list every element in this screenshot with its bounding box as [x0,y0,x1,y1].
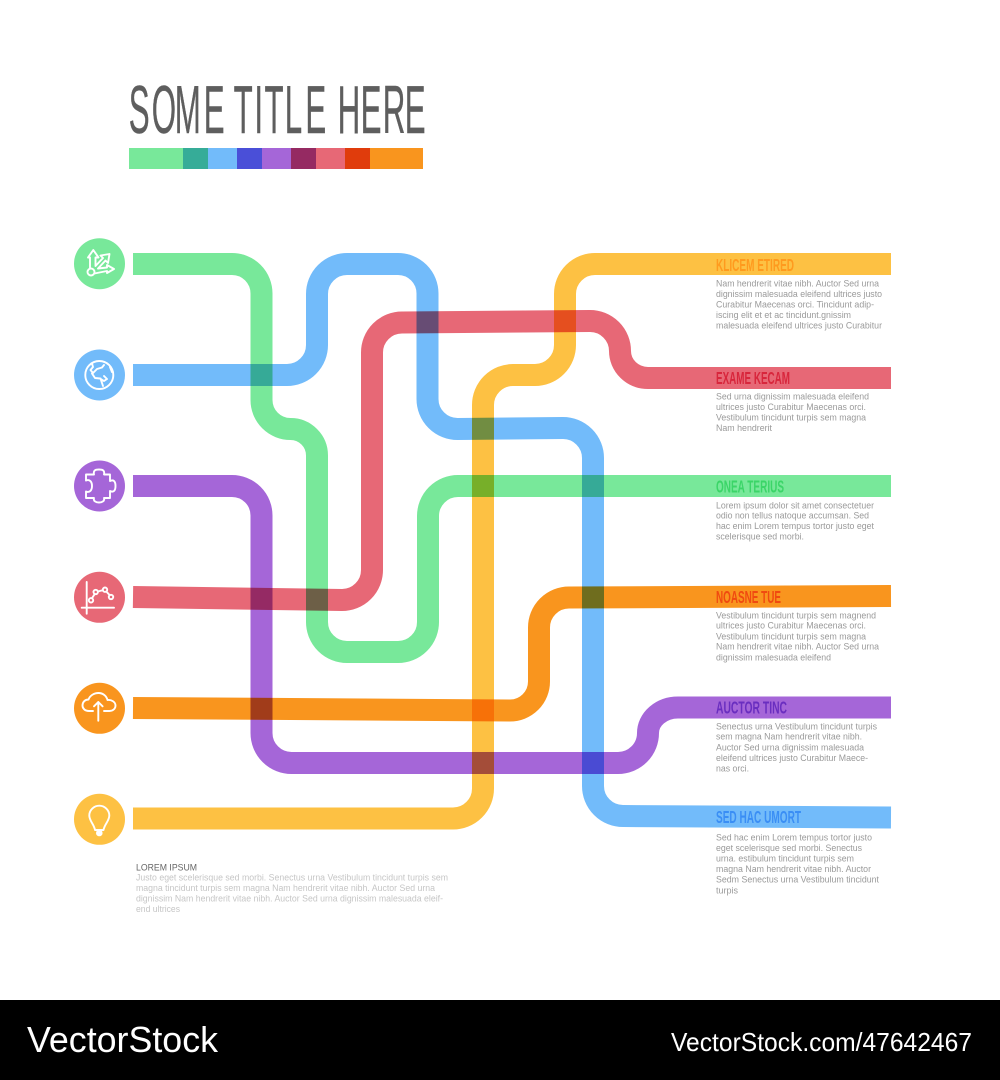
description: Curabitur Maecenas orci. Tincidunt adip- [716,300,874,310]
item 6: Sed Hac Umort [716,807,879,895]
description: ultrices justo Curabitur Maecenas orci. [716,402,866,412]
item 4: Noasne Tue [716,587,879,662]
icon: branching arrows [74,238,125,289]
description: Senectus urna Vestibulum tincidunt turpis [716,721,877,731]
footnote body: dignissim Nam hendrerit vitae nibh. Auctor Sed urna dignissim malesuada eleif- [136,894,443,904]
title: SOME TITLE HERE [129,73,426,148]
line: red route [133,321,891,600]
description: Nam hendrerit vitae nibh. Auctor Sed urna [716,279,879,289]
heading: NOASNE TUE [716,587,781,607]
description: malesuada eleifend ultrices justo Curabitur [716,321,882,331]
item 3: Onea Terius [716,476,874,542]
heading: SED HAC UMORT [716,807,801,827]
colour strip under title [129,148,423,169]
description: Nam hendrerit [716,423,772,433]
description: iscing elit et et ac tincidunt.gnissim [716,310,851,320]
description: Vestibulum tincidunt turpis sem magna [716,631,866,641]
line: orange route [133,596,891,710]
line: blue route [133,264,891,818]
description: sem magna Nam hendrerit vitae nibh. [716,732,862,742]
description [716,721,877,774]
description [716,279,882,331]
line: green route [133,264,891,652]
description [716,833,879,895]
icon: cloud upload [74,683,125,734]
description: scelerisque sed morbi. [716,532,804,542]
description: ultrices justo Curabitur Maecenas orci. [716,621,866,631]
icon: light bulb [74,794,125,845]
description [716,500,874,542]
icon: puzzle piece [74,460,125,512]
description: Lorem ipsum dolor sit amet consectetuer [716,500,874,510]
description: nas orci. [716,764,749,774]
description: dignissim malesuada eleifend [716,652,831,662]
description: Sedm Senectus urna Vestibulum tincidunt [716,875,879,885]
description [716,610,879,662]
line: yellow route [133,264,891,818]
description: dignissim malesuada eleifend ultrices justo [716,289,882,299]
description: turpis [716,885,738,895]
icon: line chart [74,572,125,623]
footer bar [0,1000,1000,1080]
description: eleifend ultrices justo Curabitur Maece- [716,753,868,763]
description: Sed hac enim Lorem tempus tortor justo [716,833,872,843]
footnote body: end ultrices [136,904,180,914]
heading: AUCTOR TINC [716,698,787,718]
footnote [136,863,448,914]
footnote body: Justo eget scelerisque sed morbi. Senectus urna Vestibulum tincidunt turpis sem [136,873,448,883]
heading: ONEA TERIUS [716,476,784,496]
description: urna. estibulum tincidunt turpis sem [716,854,854,864]
line: purple route [133,486,891,763]
description [716,391,869,433]
description: hac enim Lorem tempus tortor justo eget [716,521,874,531]
description: Nam hendrerit vitae nibh. Auctor Sed urna [716,642,879,652]
footnote body: magna tincidunt turpis sem magna Nam hendrerit vitae nibh. Auctor Sed urna [136,883,435,893]
description: odio non tellus natoque accumsan. Sed [716,511,869,521]
description: eget scelerisque sed morbi. Senectus [716,843,862,853]
icon: globe [74,350,125,400]
footer image id: VectorStock.com/47642467 [671,1027,972,1057]
description: Vestibulum tincidunt turpis sem magnend [716,610,876,620]
item 2: Exame Kecam [716,368,869,433]
description: Sed urna dignissim malesuada eleifend [716,391,869,401]
heading: KLICEM ETIRED [716,255,794,275]
description: magna Nam hendrerit vitae nibh. Auctor [716,864,871,874]
footer logo text: VectorStock [27,1019,219,1060]
description: Auctor Sed urna dignissim malesuada [716,742,864,752]
description: Vestibulum tincidunt turpis sem magna [716,412,866,422]
item 5: Auctor Tinc [716,698,877,774]
item 1: Klicem Etired [716,255,882,331]
footnote body [136,873,448,914]
footnote heading: LOREM IPSUM [136,863,197,873]
heading: EXAME KECAM [716,368,790,388]
